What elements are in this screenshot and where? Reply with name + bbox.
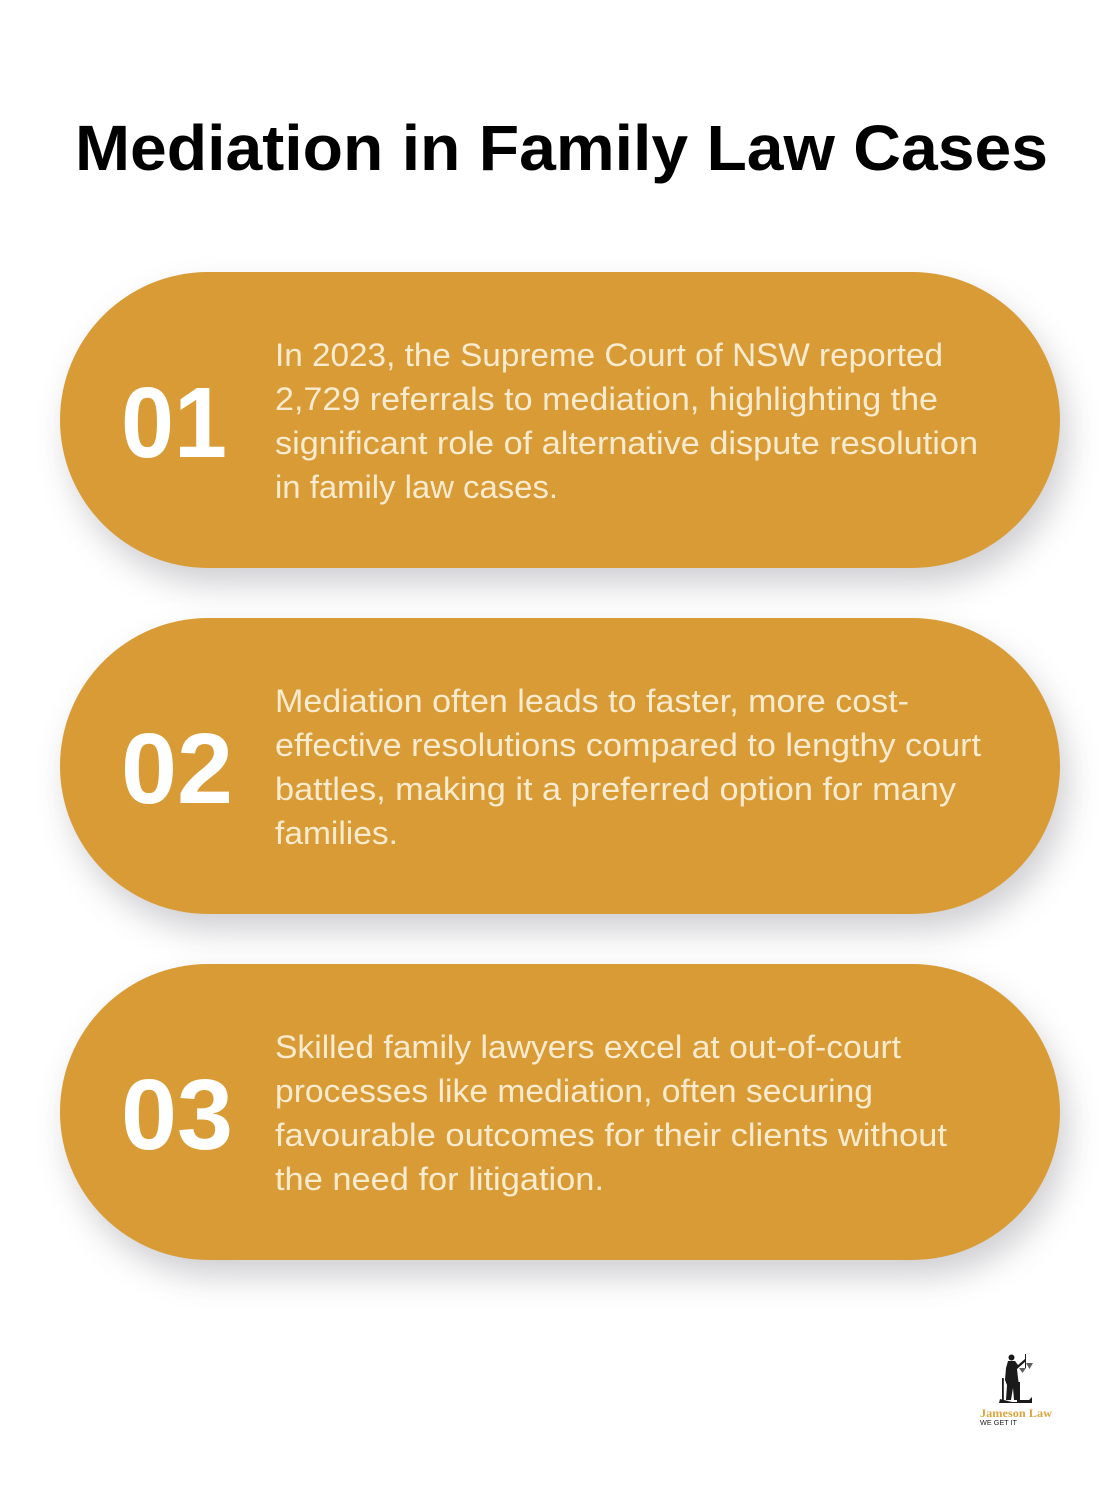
- text block 03: [275, 1029, 947, 1197]
- text block 01: significant role of alternative dispute resolution: [275, 425, 978, 461]
- text block 02: [275, 683, 981, 851]
- number 01: 01: [121, 367, 227, 479]
- text block 02: battles, making it a preferred option for many: [275, 771, 956, 807]
- text block 02: families.: [275, 815, 398, 851]
- text block 02: Mediation often leads to faster, more cost-: [275, 683, 909, 719]
- text block 03: the need for litigation.: [275, 1161, 604, 1197]
- logo: Jameson Law: [980, 1354, 1053, 1427]
- number 03: 03: [121, 1059, 233, 1171]
- logo name: Jameson Law: [980, 1408, 1053, 1420]
- text block 01: [275, 337, 978, 505]
- text block 01: In 2023, the Supreme Court of NSW reported: [275, 337, 943, 373]
- text block 01: 2,729 referrals to mediation, highlighting the: [275, 381, 938, 417]
- icon: lady justice: [999, 1354, 1033, 1403]
- panel: step 03: [60, 964, 1060, 1260]
- text block 01: in family law cases.: [275, 469, 558, 505]
- text block 03: favourable outcomes for their clients without: [275, 1117, 947, 1153]
- number 02: 02: [121, 713, 233, 825]
- text block 03: Skilled family lawyers excel at out-of-court: [275, 1029, 901, 1065]
- text block 02: effective resolutions compared to lengthy court: [275, 727, 981, 763]
- panel: step 02: [60, 618, 1060, 914]
- text block 03: processes like mediation, often securing: [275, 1073, 873, 1109]
- panel background 03: [60, 964, 1060, 1260]
- panel background 02: [60, 618, 1060, 914]
- panel: step 01: [60, 272, 1060, 568]
- panel background 01: [60, 272, 1060, 568]
- logo tagline: WE GET IT: [980, 1418, 1017, 1427]
- title: Mediation in Family Law Cases: [75, 112, 1048, 184]
